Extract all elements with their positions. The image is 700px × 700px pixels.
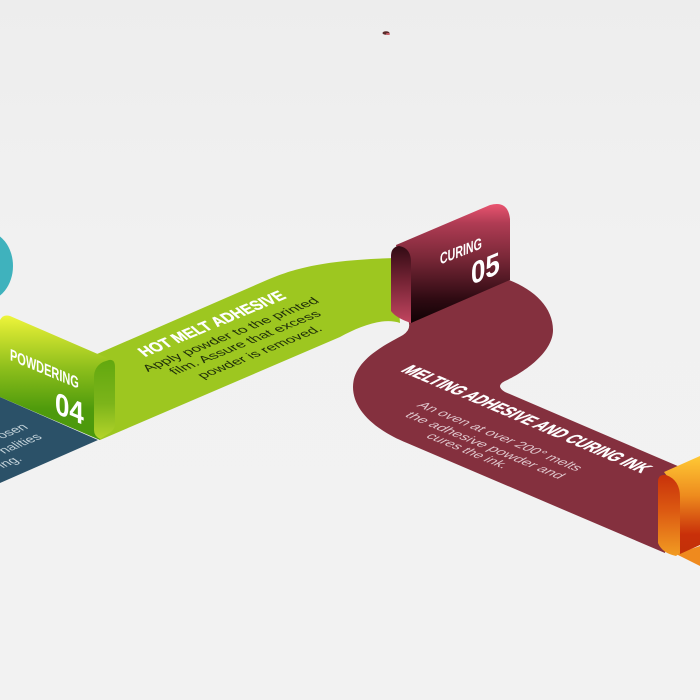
step number: 04: [55, 385, 84, 432]
blue ribbon body text: [0, 421, 46, 470]
block end cap: [391, 246, 411, 323]
green ribbon body text: film. Assure that excess: [165, 308, 325, 377]
block end cap: [658, 475, 680, 556]
panel: red ribbon: [353, 280, 680, 553]
step label: CURING: [440, 235, 482, 269]
step label: POWDERING: [10, 345, 79, 393]
green ribbon body text: Apply powder to the printed: [138, 295, 323, 374]
panel: curing block: [391, 204, 510, 323]
red ribbon heading: MELTING ADHESIVE AND CURING INK: [396, 362, 658, 475]
green ribbon body text: powder is removed.: [193, 323, 326, 381]
block front face: [396, 204, 510, 323]
red ribbon body text: cures the ink.: [422, 431, 513, 470]
block end cap: [94, 360, 115, 439]
panel: powdering block: [0, 316, 115, 440]
green ribbon heading: HOT MELT ADHESIVE: [134, 288, 290, 360]
small dark mark: [382, 31, 390, 35]
block front face: [664, 456, 700, 554]
orange ribbon: [676, 546, 700, 566]
red ribbon body text: the adhesive powder and: [401, 410, 569, 481]
block front face: [0, 316, 107, 440]
panel: blue ribbon: [0, 397, 98, 483]
step number: 05: [471, 245, 500, 292]
panel: green ribbon: [97, 258, 400, 440]
red ribbon body text: An oven at over 200° melts: [413, 400, 587, 473]
teal circle step: [0, 231, 13, 301]
panel: orange block: [658, 456, 700, 566]
